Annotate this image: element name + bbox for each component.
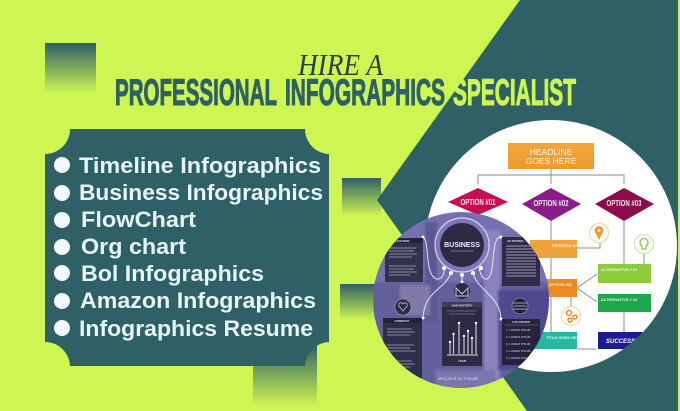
service: bol infographics: Bol Infographics xyxy=(81,261,264,286)
card: locations bottom right: 4. LOREM IPSUM xyxy=(506,349,531,353)
green alternative box 1 xyxy=(598,264,651,283)
service: flowchart: FlowChart xyxy=(81,207,197,232)
card: locations bottom right: LOCATIONS xyxy=(512,320,530,324)
orange step box xyxy=(530,240,597,258)
green alternative box 1: ALTERNATIVE # 01 xyxy=(601,267,638,272)
dark purple circle business infographic xyxy=(373,212,553,392)
card: bar chart: YEAR xyxy=(458,359,467,363)
diamond: option 01: OPTION #01 xyxy=(460,198,496,207)
gradient square: middle lower xyxy=(340,284,380,320)
service: business infographics: Business Infographics xyxy=(79,180,323,205)
card: milestone top left xyxy=(385,238,423,282)
panel: services list xyxy=(45,129,329,366)
diamond: option 03: OPTION #03 xyxy=(606,199,642,208)
orange decision box: OPTION #02 xyxy=(549,282,573,287)
main title xyxy=(115,72,576,113)
main title: SPECIALIST xyxy=(453,72,576,113)
gradient square: bottom xyxy=(253,345,317,406)
diamond: option 02: OPTION #02 xyxy=(534,199,569,208)
orange decision box xyxy=(546,279,577,297)
teal diagonal panel xyxy=(377,0,678,411)
gradient square: middle upper xyxy=(342,178,381,216)
diamond: option 02 xyxy=(522,188,581,221)
teal step box xyxy=(530,332,582,349)
business badge: BUSINESS xyxy=(444,242,480,249)
success box xyxy=(598,332,648,349)
icon: light bulb xyxy=(634,234,654,254)
green alternative box 2 xyxy=(598,294,651,312)
credit line: designed by Freepik xyxy=(438,376,479,381)
business badge xyxy=(435,218,489,272)
flowchart connectors xyxy=(478,169,644,349)
headline box: HEADLINE xyxy=(530,147,573,157)
gradient square: top left xyxy=(45,43,96,93)
main title: INFOGRAPHICS xyxy=(285,72,445,113)
diamond: option 03 xyxy=(595,188,654,221)
card: locations bottom right: 5. LOREM IPSUM xyxy=(506,356,531,360)
card: company bottom left: COMPANY xyxy=(394,319,410,323)
success box: SUCCESS! xyxy=(606,339,637,345)
service: amazon infographics: Amazon Infographics xyxy=(80,288,316,313)
card: locations bottom right: 1. LOREM IPSUM xyxy=(506,328,531,332)
service: infographics resume: Infographics Resume xyxy=(79,316,313,341)
card: activities top right xyxy=(502,237,540,286)
icon: globe badge xyxy=(512,298,528,314)
headline box: GOES HERE xyxy=(526,156,577,166)
main title: PROFESSIONAL xyxy=(115,72,277,113)
orange step box: PROCESS GOES HERE xyxy=(552,243,597,248)
card: activities top right: ACTIVITIES xyxy=(507,239,524,243)
card: milestone top left: MILESTONE xyxy=(392,239,409,243)
icon: heart badge xyxy=(395,299,411,315)
icon: envelope chart xyxy=(454,283,470,299)
white connector curves xyxy=(423,237,501,319)
white circle flowchart image xyxy=(425,120,677,372)
teal step box: TITLE GOES HERE xyxy=(546,335,582,340)
hire a heading: HIRE A xyxy=(297,47,384,82)
card: locations bottom right: 3. LOREM IPSUM xyxy=(506,342,531,346)
headline box xyxy=(508,143,594,169)
skyline texture xyxy=(373,222,553,392)
business badge: INFOGRAPHICS xyxy=(451,249,473,253)
card: bar chart xyxy=(442,302,482,366)
green alternative box 2: ALTERNATIVE # 02 xyxy=(601,297,638,302)
card: locations bottom right xyxy=(502,319,540,365)
service: timeline infographics: Timeline Infographics xyxy=(79,153,321,178)
icon: location pin xyxy=(590,224,608,242)
card: company bottom left xyxy=(383,318,422,378)
card: locations bottom right: 2. LOREM IPSUM xyxy=(506,335,531,339)
card: bar chart: OUR HISTORY xyxy=(452,304,472,308)
connector dots xyxy=(422,236,502,320)
diamond: option 01 xyxy=(448,188,508,215)
service: org chart: Org chart xyxy=(81,234,187,259)
right edge strip xyxy=(678,0,680,411)
icon: gears xyxy=(562,306,580,326)
